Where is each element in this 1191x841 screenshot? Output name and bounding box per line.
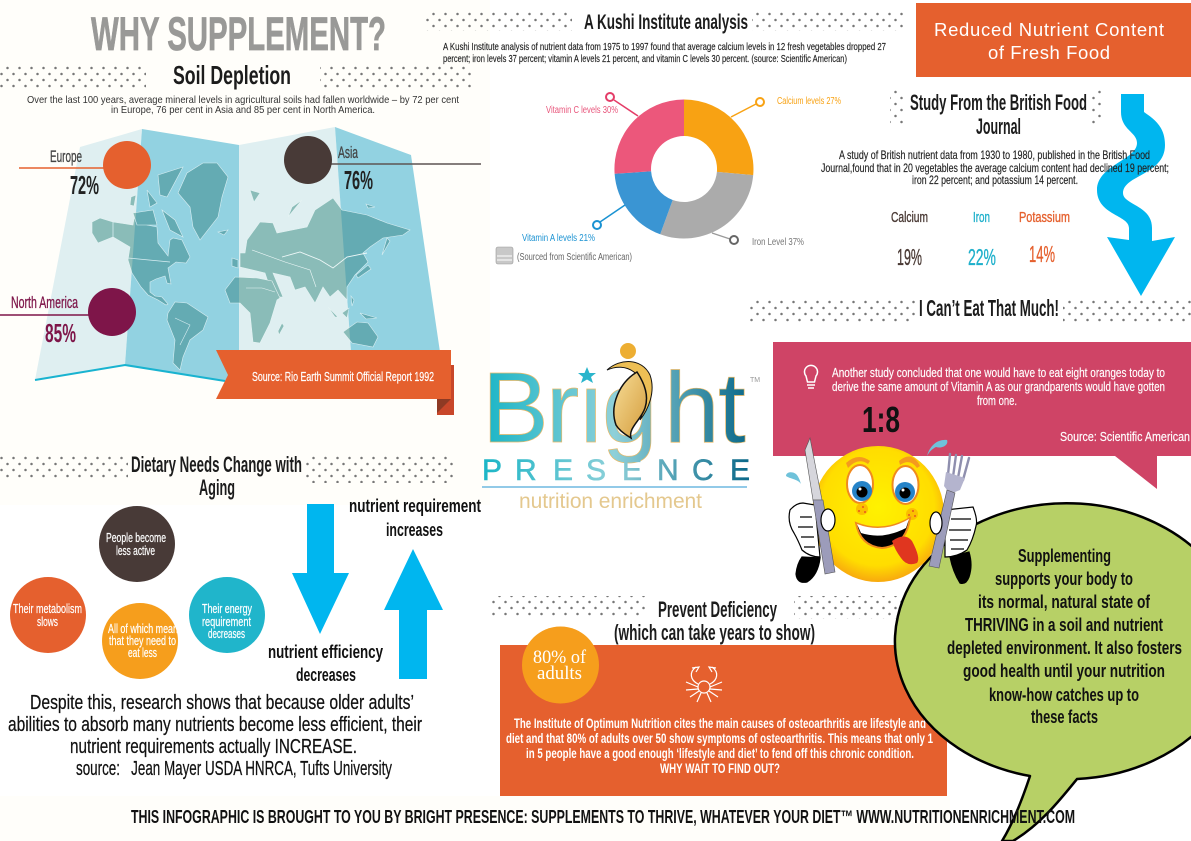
icon: water drops (786, 440, 947, 484)
callout: Asia (284, 136, 481, 195)
text: oranges (832, 366, 1190, 444)
text: British study paragraph (821, 148, 1169, 187)
text: Kushi paragraph: A Kushi Institute analysis of nutrient data from 1975 to 1997 found that average calcium levels in 12 fresh vegetables dropped 27 (443, 41, 886, 53)
banner: reduced nutrient content (916, 3, 1191, 77)
circle: 80% of adults: adults (537, 663, 582, 684)
text: aging paragraph: nutrient requirements actually INCREASE. (70, 736, 357, 758)
source ribbon: Source: Rio Earth Summit Official Report 1992 (252, 369, 434, 384)
circle: less active: People become (106, 531, 166, 545)
stat: calcium: Calcium (891, 209, 928, 226)
logo: Bright Presence (482, 343, 760, 513)
label: efficiency decreases: decreases (296, 665, 356, 685)
icon: fork (929, 454, 969, 568)
orange box (500, 645, 947, 796)
icon: smiley face (812, 446, 944, 582)
source ribbon (216, 350, 454, 415)
circle: metabolism (10, 577, 86, 653)
icon: thumbs (821, 509, 942, 534)
label: requirement increases (349, 496, 481, 540)
text: aging paragraph (8, 692, 422, 780)
text: osteoarthritis: diet and that 80% of adults over 50 show symptoms of osteoarthritis. This means that only 1 (506, 731, 933, 746)
label: efficiency decreases: nutrient efficiency (268, 642, 383, 662)
legend: iron (712, 233, 804, 248)
legend: vitamin C (546, 93, 638, 116)
stat: iron (968, 209, 996, 270)
circle: less active (99, 506, 175, 582)
callout: North America (0, 288, 136, 348)
circle: 80% of adults (522, 626, 599, 704)
text: osteoarthritis: The Institute of Optimum Nutrition cites the main causes of osteoarthritis are lifestyle and (514, 716, 926, 731)
heading: British study (910, 90, 1087, 139)
circle: eat less (102, 603, 178, 679)
legend: vitamin A: Vitamin A levels 21% (522, 233, 595, 244)
legend: calcium: Calcium levels 27% (777, 96, 841, 107)
panel: I can't eat that much (750, 295, 1191, 489)
stat: calcium: 19% (897, 244, 922, 270)
panel: British Food Journal study (821, 90, 1169, 270)
circle: eat less: All of which mean (108, 622, 178, 636)
circle: energy: decreases (208, 627, 245, 641)
text: aging paragraph: abilities to absorb many nutrients become less efficient, their (8, 714, 422, 736)
emoji with knife and fork (786, 438, 977, 583)
circle: metabolism: slows (37, 615, 58, 629)
text: bubble copy: these facts (1031, 707, 1098, 727)
heading: prevent: Prevent Deficiency (658, 597, 777, 622)
heading: prevent (614, 597, 815, 645)
speech bubble: supplementing (895, 503, 1191, 841)
panel: prevent deficiency (490, 596, 947, 796)
text: British study paragraph: iron 22 percent; and potassium 14 percent. (912, 173, 1078, 187)
label: efficiency decreases (268, 642, 383, 685)
icon: knife (805, 438, 835, 574)
panel: Kushi Institute analysis (426, 11, 905, 264)
legend: vitamin A (522, 205, 625, 244)
text: oranges: from one. (977, 394, 1017, 408)
logo: Bright Presence: TM (750, 377, 760, 384)
circle: eat less: that they need to (109, 634, 176, 648)
heading: dietary (131, 452, 302, 500)
title: WHY SUPPLEMENT? (91, 7, 386, 60)
legend: vitamin C: Vitamin C levels 30% (546, 105, 618, 116)
callout: Europe: Europe (50, 147, 82, 166)
circle: less active: less active (116, 544, 155, 558)
banner: reduced nutrient content: of Fresh Food (988, 42, 1110, 63)
label: requirement increases: nutrient requirement (349, 496, 481, 516)
circle: 80% of adults: 80% of (533, 647, 587, 668)
banner: reduced nutrient content: Reduced Nutrient Content (934, 19, 1164, 40)
icon: crab (686, 667, 722, 702)
heading: soil depletion: Soil Depletion (173, 60, 291, 90)
logo: Bright Presence: PRESENCE (482, 454, 750, 487)
callout: North America: 85% (45, 318, 76, 348)
arrow: wavy blue (1097, 94, 1175, 296)
icon: light bulb (805, 365, 818, 388)
stat: iron: Iron (973, 209, 990, 226)
panel: dietary needs (0, 452, 481, 780)
icon: gloves and sleeves (789, 503, 977, 583)
callout: Europe: 72% (70, 170, 99, 200)
text: aging paragraph: Despite this, research shows that because older adults’ (30, 692, 414, 714)
text: bubble copy (947, 546, 1182, 727)
panel: soil depletion (0, 60, 481, 415)
text: osteoarthritis: in 5 people have a good enough ‘lifestyle and diet’ to fend off this chronic condition. (526, 746, 914, 761)
logo: Bright Presence: Bright (482, 352, 746, 464)
callout: North America: North America (11, 293, 78, 312)
callout: Europe (19, 141, 151, 200)
icon: gold figure (607, 343, 652, 438)
label: requirement increases: increases (386, 520, 443, 540)
text: Kushi paragraph: percent; iron levels 37 percent; vitamin A levels 21 percent, and vitamin C levels 30 percent. (source: Scientific American) (443, 53, 847, 65)
stat: ratio: 1:8 (862, 399, 900, 440)
heading: dietary: Dietary Needs Change with (131, 452, 302, 477)
stat: iron: 22% (968, 244, 996, 270)
text: bubble copy: supports your body to (995, 569, 1133, 589)
circle: energy: requirement (202, 615, 251, 629)
text: osteoarthritis: WHY WAIT TO FIND OUT? (660, 761, 780, 776)
circle: metabolism: Their metabolism (13, 602, 82, 616)
circle: energy: Their energy (202, 602, 253, 616)
text: Kushi paragraph (443, 41, 886, 65)
speech box (773, 342, 1191, 489)
circle: energy (189, 577, 265, 653)
callout: Asia: Asia (338, 143, 358, 162)
text: soil intro: in Europe, 76 per cent in Asia and 85 per cent in North America. (111, 104, 375, 116)
folded world map (35, 127, 440, 382)
legend: calcium (731, 96, 841, 117)
circle: eat less: eat less (128, 646, 157, 660)
text: aging paragraph: source: Jean Mayer USDA HNRCA, Tufts University (76, 758, 392, 780)
logo: Bright Presence: nutrition enrichment (519, 490, 702, 513)
legend: iron: Iron Level 37% (752, 237, 804, 248)
icon: source note: (Sourced from Scientific American) (517, 252, 632, 263)
stat: potassium: Potassium (1019, 209, 1070, 226)
heading: Kushi: A Kushi Institute analysis (584, 11, 748, 34)
heading: cant eat: I Can’t Eat That Much! (919, 295, 1059, 321)
heading: dietary: Aging (199, 475, 235, 500)
arrow: down (292, 504, 349, 634)
text: soil intro (27, 94, 459, 116)
heading: prevent: (which can take years to show) (614, 620, 815, 645)
donut chart (522, 93, 841, 248)
text: soil intro: Over the last 100 years, average mineral levels in agricultural soils had fallen worldwide – by 72 per cent (27, 94, 459, 106)
arrow: up (384, 549, 443, 679)
callout: Asia: 76% (344, 165, 373, 195)
stat: potassium: 14% (1029, 241, 1055, 267)
heading: British study: Journal (976, 114, 1021, 139)
icon: source note (496, 247, 632, 264)
stat: calcium (891, 209, 928, 270)
stat: potassium (1019, 209, 1070, 267)
text: osteoarthritis (506, 716, 933, 776)
icon: star (578, 367, 596, 383)
text: bubble copy: Supplementing (1018, 546, 1111, 566)
